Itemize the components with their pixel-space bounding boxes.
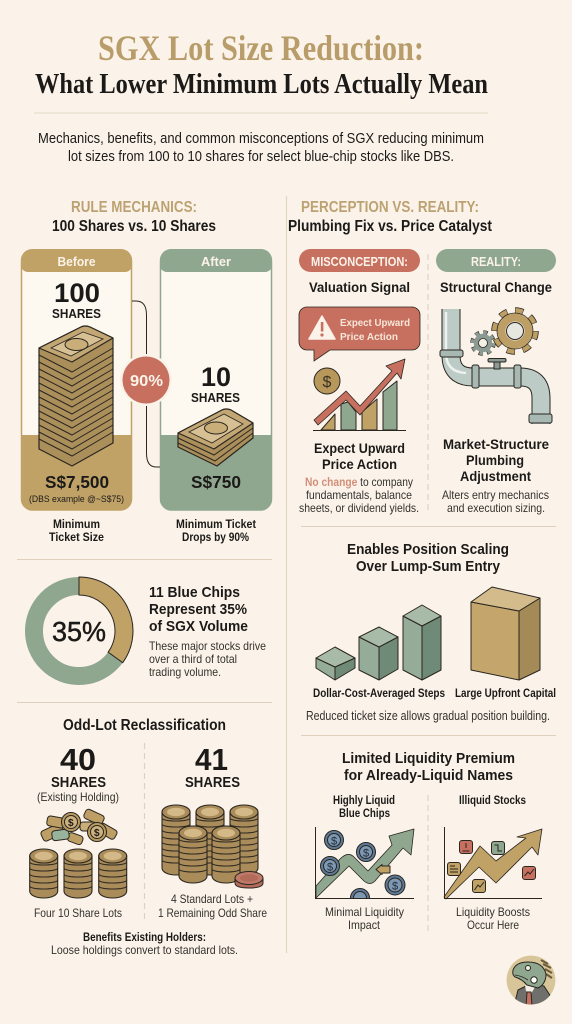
text: 11 blue chips	[149, 584, 266, 679]
panel: misconception: fundamentals, balance	[306, 488, 412, 502]
title	[35, 28, 488, 100]
caption: minimum ticket size	[49, 517, 104, 544]
panel: 41 shares: 1 Remaining Odd Share	[158, 906, 267, 920]
panel: reality: and execution sizing.	[447, 501, 545, 515]
panel: reality: Plumbing	[466, 452, 524, 468]
heading: position scaling: Enables Position Scaling	[347, 541, 509, 558]
panel: 40 shares: (Existing Holding)	[37, 790, 119, 804]
heading: rule mechanics: RULE MECHANICS:	[71, 199, 197, 216]
panel: after: S$750	[191, 472, 241, 492]
chart: green arrow with coins: $	[392, 880, 398, 892]
panel: reality: Structural Change	[440, 279, 552, 295]
heading: perception vs reality	[288, 199, 493, 235]
panel: misconception: No change to company	[305, 475, 413, 489]
icon: tall money stack	[39, 326, 113, 466]
caption: minimum ticket size: Minimum	[53, 517, 100, 531]
chart: large gold block	[471, 587, 540, 680]
panel: misconception	[299, 249, 420, 515]
panel: misconception: Price Action	[322, 456, 397, 472]
title: What Lower Minimum Lots Actually Mean	[35, 68, 488, 100]
icon: iguana mascot	[506, 956, 556, 1006]
heading: perception vs reality: Plumbing Fix vs. Price Catalyst	[288, 218, 493, 235]
panel: misconception: MISCONCEPTION:	[311, 254, 408, 269]
panel: illiquid stocks: Liquidity Boosts	[456, 905, 530, 919]
panel: 40 shares: 40	[60, 742, 96, 777]
text: 11 blue chips: over a third of total	[149, 652, 237, 666]
icon: warning speech bubble: Expect Upward	[340, 317, 410, 329]
icon: warning speech bubble	[299, 307, 420, 361]
panel: 40 shares: SHARES	[51, 775, 106, 791]
labels: cube captions: Dollar-Cost-Averaged Steps	[313, 688, 445, 700]
heading: perception vs reality: PERCEPTION VS. REALITY:	[301, 199, 479, 216]
panel: 41 shares: SHARES	[185, 775, 240, 791]
callout: benefits existing holders: Benefits Existing Holders:	[83, 930, 206, 944]
panel: illiquid stocks: Occur Here	[467, 918, 519, 932]
icon: pipes and gears	[440, 309, 552, 424]
text: 11 blue chips: Represent 35%	[149, 601, 247, 618]
labels: cube captions	[306, 688, 556, 723]
text: 11 blue chips: of SGX Volume	[149, 618, 248, 635]
donut chart: 35%: 35%	[52, 616, 106, 647]
icon: warning speech bubble: Price Action	[340, 331, 398, 343]
icon: five coin stacks and chip	[162, 805, 263, 888]
subtitle: lot sizes from 100 to 10 shares for select blue-chip stocks like DBS.	[68, 148, 454, 165]
panel: reality: Market-Structure	[443, 436, 549, 452]
heading: rule mechanics: 100 Shares vs. 10 Shares	[52, 218, 216, 235]
panel: after: SHARES	[191, 390, 240, 405]
labels: cube captions: Large Upfront Capital	[455, 688, 556, 700]
heading: position scaling	[347, 541, 509, 575]
panel: highly liquid blue chips: Minimal Liquidity	[325, 905, 404, 919]
panel: misconception: Valuation Signal	[309, 279, 410, 295]
icon: rising chart with coin	[313, 359, 406, 430]
icon: loose coins and notes	[40, 808, 118, 845]
icon: short money stack	[178, 409, 253, 466]
panel: before: S$7,500	[45, 472, 109, 492]
panel: reality	[436, 249, 556, 515]
title: SGX Lot Size Reduction:	[98, 28, 424, 68]
heading: limited liquidity premium	[342, 750, 515, 784]
text: 11 blue chips: 11 Blue Chips	[149, 584, 240, 601]
heading: position scaling: Over Lump-Sum Entry	[356, 558, 501, 575]
heading: limited liquidity premium: for Already-Liquid Names	[344, 767, 513, 784]
panel: illiquid stocks	[444, 795, 542, 932]
chart: green arrow with coins: $	[363, 848, 369, 860]
text: 11 blue chips: These major stocks drive	[149, 639, 266, 653]
panel: misconception: Expect Upward	[314, 440, 405, 456]
panel: before	[21, 249, 132, 510]
panel: 41 shares: 41	[195, 742, 228, 777]
panel: after	[160, 249, 272, 510]
panel: before: 100	[54, 278, 100, 308]
panel: misconception: sheets, or dividend yields.	[299, 501, 419, 515]
panel: highly liquid blue chips: Impact	[348, 918, 381, 932]
caption: minimum ticket size: Ticket Size	[49, 530, 104, 544]
icon: rising chart with coin: $	[322, 374, 332, 391]
caption: minimum ticket drops: Minimum Ticket	[176, 517, 256, 531]
icon: loose coins and notes: $	[94, 828, 100, 839]
panel: illiquid stocks: Illiquid Stocks	[459, 795, 526, 807]
icon: loose coins and notes: $	[68, 818, 74, 829]
panel: 41 shares	[158, 742, 267, 920]
icon: three coin stacks	[30, 849, 127, 898]
panel: reality: REALITY:	[471, 254, 521, 269]
caption: minimum ticket drops	[176, 517, 256, 544]
caption: minimum ticket drops: Drops by 90%	[182, 530, 249, 544]
panel: 40 shares	[30, 742, 127, 920]
heading: limited liquidity premium: Limited Liquidity Premium	[342, 750, 515, 767]
chart: stepped green cubes	[316, 605, 441, 680]
panel: highly liquid blue chips: Blue Chips	[339, 808, 390, 820]
donut chart: 35%	[34, 577, 133, 676]
panel: highly liquid blue chips	[316, 795, 414, 932]
chart: gold arrow with icons	[444, 827, 542, 899]
badge: 90%	[120, 354, 172, 406]
heading: rule mechanics	[52, 199, 216, 235]
panel: before: Before	[58, 254, 96, 269]
panel: reality: Adjustment	[460, 468, 531, 484]
chart: green arrow with coins: $	[331, 836, 337, 848]
connector bracket	[132, 301, 160, 467]
chart: green arrow with coins: $	[327, 862, 333, 874]
panel: 41 shares: 4 Standard Lots +	[171, 892, 253, 906]
panel: 40 shares: Four 10 Share Lots	[34, 906, 122, 920]
panel: highly liquid blue chips: Highly Liquid	[333, 795, 395, 807]
panel: before: SHARES	[52, 306, 101, 321]
panel: after: After	[201, 254, 231, 269]
chart: green arrow with coins	[316, 827, 414, 908]
subtitle	[38, 130, 484, 165]
panel: before: (DBS example @~S$75)	[29, 494, 124, 505]
subtitle: Mechanics, benefits, and common misconceptions of SGX reducing minimum	[38, 130, 484, 147]
callout: benefits existing holders	[51, 930, 238, 957]
panel: reality: Alters entry mechanics	[442, 488, 549, 502]
text: 11 blue chips: trading volume.	[149, 665, 221, 679]
panel: after: 10	[201, 362, 231, 392]
badge: 90%: 90%	[130, 373, 163, 390]
heading: odd-lot reclassification: Odd-Lot Reclassification	[63, 717, 226, 734]
callout: benefits existing holders: Loose holdings convert to standard lots.	[51, 943, 238, 957]
